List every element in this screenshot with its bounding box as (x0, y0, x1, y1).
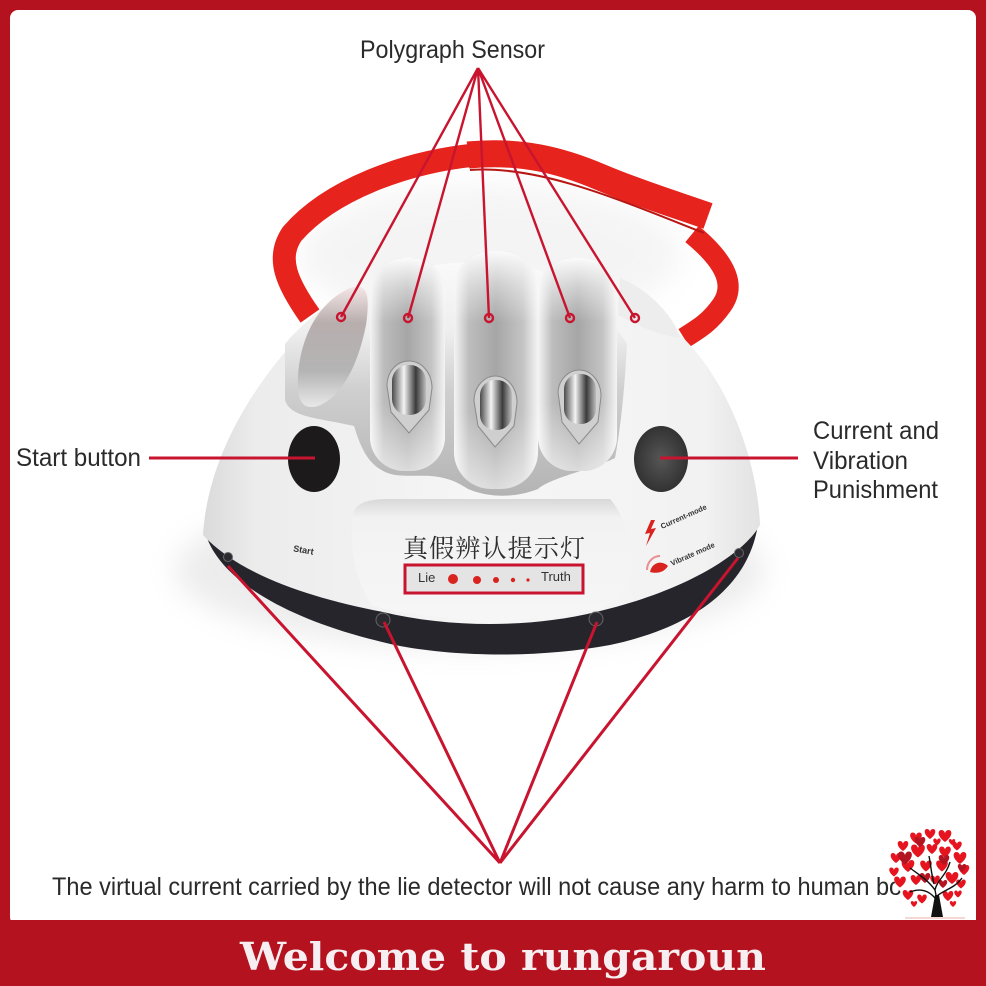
label: polygraph sensor: Polygraph Sensor (360, 36, 545, 64)
start button (288, 426, 340, 492)
sensor finger 1 (298, 287, 368, 407)
chinese display heading: 真假辨认提示灯 (403, 529, 585, 565)
callout lines: base sensors (228, 558, 738, 863)
device illustration (203, 154, 760, 654)
sensor finger 4 (538, 258, 617, 471)
chrome electrode 3 (558, 370, 601, 444)
label: current and vibration punishment: Current and (813, 417, 939, 445)
chrome electrode 1 (387, 361, 432, 433)
strap: right loop behind body (684, 234, 728, 338)
footer band (0, 920, 986, 986)
silver hand recess outline (285, 262, 627, 496)
label: current and vibration punishment (813, 417, 939, 504)
soft shadow around device (175, 185, 765, 648)
base sensor studs (224, 548, 744, 627)
vibrate mode legend: Vibrate mode (669, 540, 716, 568)
callout line: start button (149, 456, 315, 460)
sensor finger 5 white stripe (618, 278, 680, 338)
lie truth indicator box: Truth (541, 569, 571, 584)
black base (206, 530, 757, 654)
current mode legend (645, 502, 708, 546)
callout lines: polygraph sensor (337, 68, 639, 322)
label: start button: Start button (16, 444, 141, 472)
sensor finger 2 (370, 258, 445, 471)
punishment button (634, 426, 688, 492)
label: current and vibration punishment: Punishment (813, 476, 938, 504)
chrome electrode 2 (474, 376, 517, 447)
label: current and vibration punishment: Vibration (813, 447, 908, 475)
lie truth indicator box: Lie (418, 570, 435, 585)
start label: Start (293, 543, 314, 557)
strap: left loop behind body (284, 155, 475, 316)
sensor finger 3 (454, 251, 538, 489)
logo: heart tree (889, 829, 976, 920)
raised display panel (352, 499, 632, 620)
white dome (203, 261, 760, 624)
callout line: punishment button (660, 456, 798, 460)
current mode legend: Current-mode (659, 502, 708, 531)
footer title: Welcome to rungaroun (239, 934, 766, 979)
vibrate mode legend (647, 540, 716, 573)
safety note: The virtual current carried by the lie detector will not cause any harm to human body (52, 873, 927, 901)
lie truth indicator box (405, 565, 583, 593)
strap: front flap (468, 154, 708, 216)
